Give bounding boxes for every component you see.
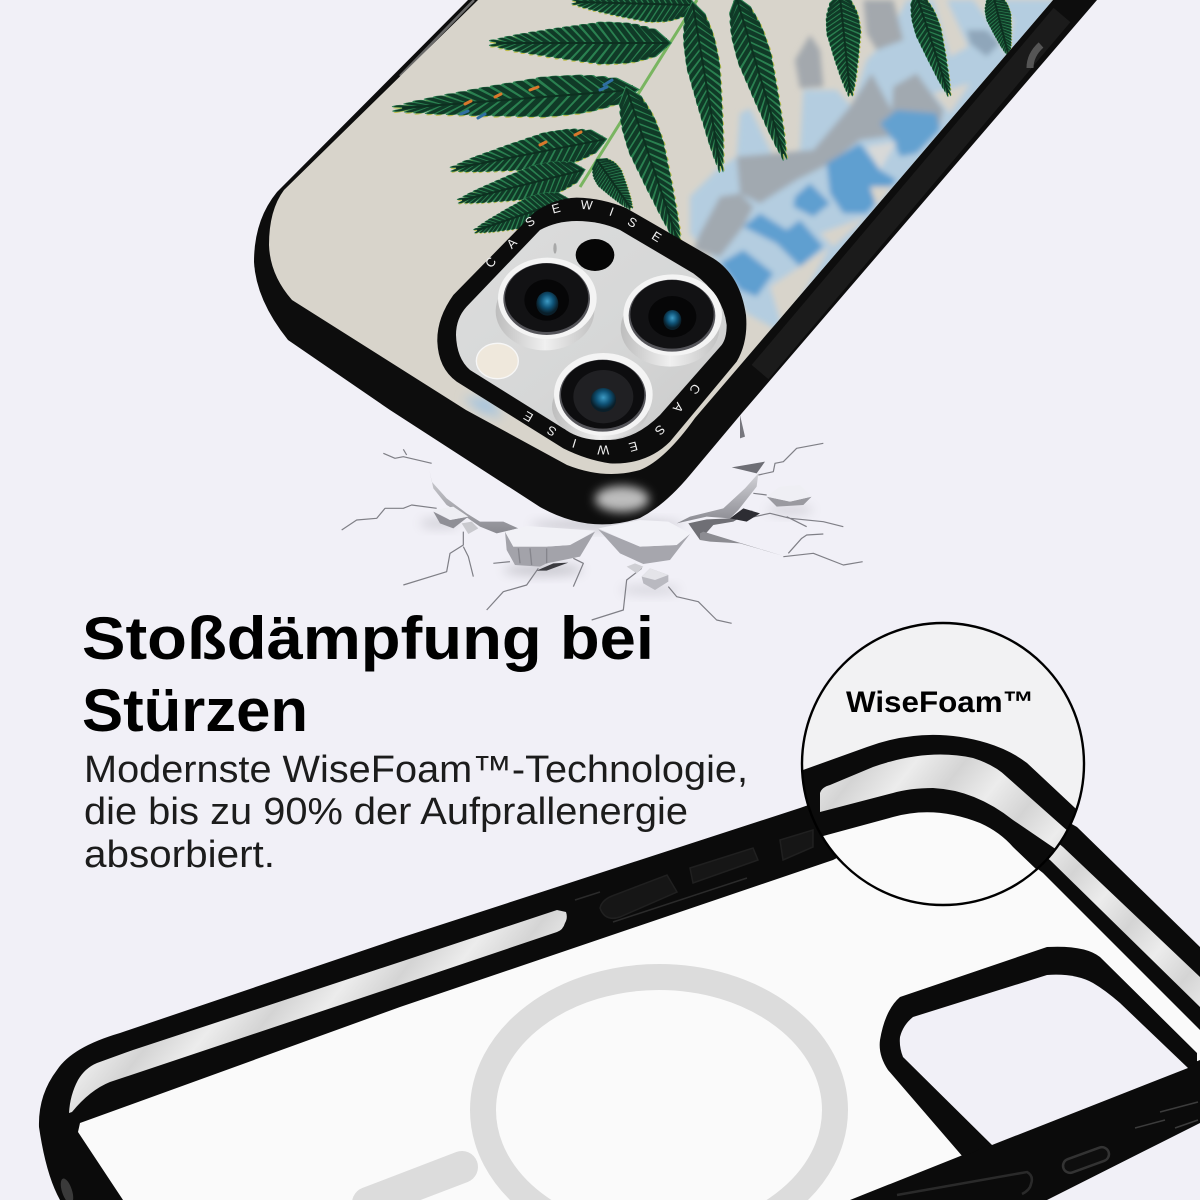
heading: Stürzen — [82, 677, 308, 744]
button seam lines — [575, 878, 747, 922]
heading: Stoßdämpfung bei — [82, 605, 654, 672]
callout: WiseFoam magnified circle — [800, 622, 1086, 906]
lens right — [621, 274, 722, 367]
brand text on camera frame: C — [686, 381, 703, 397]
callout label: WiseFoam™ — [846, 686, 1034, 719]
microphone hole — [576, 239, 614, 271]
lower left paint trace — [463, 397, 503, 418]
body text: Modernste WiseFoam™-Technologie, — [84, 749, 748, 791]
brand text on camera frame: S — [625, 214, 639, 231]
bottom edge button — [897, 1172, 1032, 1195]
small pin — [553, 243, 557, 254]
body text: die bis zu 90% der Aufprallenergie — [84, 791, 688, 833]
lens bottom — [552, 353, 653, 440]
lens upper left — [496, 258, 597, 350]
fern fronds — [395, 0, 1021, 248]
brand text on camera frame: E — [521, 408, 536, 425]
bottom edge streaks — [1135, 1102, 1198, 1128]
case outer bumper — [39, 755, 1200, 1200]
crack lines — [342, 443, 863, 623]
middle right stone — [598, 529, 690, 564]
brand text on camera frame — [483, 198, 703, 457]
small left stones — [433, 512, 468, 528]
camera module — [437, 198, 746, 463]
camera cutout opening — [900, 975, 1188, 1145]
tiny stones — [627, 563, 643, 573]
bottom open case — [39, 755, 1200, 1200]
camera plate — [456, 221, 727, 440]
brand text on camera frame: A — [670, 400, 686, 416]
right plate — [677, 473, 758, 523]
left edge port — [58, 1177, 76, 1200]
brand text on camera frame: E — [550, 201, 562, 217]
camera bump frame — [437, 198, 746, 463]
brand text on camera frame: E — [627, 438, 639, 454]
side buttons — [600, 830, 813, 918]
heading — [82, 605, 654, 744]
brand text on camera frame: C — [483, 255, 499, 271]
phone outer bumper — [254, 0, 1097, 524]
magnetic ring — [483, 977, 835, 1200]
brand text on camera frame: I — [607, 205, 616, 219]
fern colour accents — [461, 80, 612, 145]
brand text on camera frame: I — [571, 436, 578, 450]
brand text on camera frame: S — [523, 214, 538, 230]
top phone case — [254, 0, 1097, 524]
right foam slot — [1020, 820, 1200, 1007]
body text: absorbiert. — [84, 834, 275, 876]
brand text on camera frame: A — [504, 235, 520, 252]
flash — [476, 343, 518, 379]
cracked ground impact — [342, 415, 863, 623]
camera cutout frame — [880, 947, 1197, 1157]
bumper top left edge highlight — [400, 0, 474, 76]
watercolour sky — [463, 0, 1087, 418]
bottom edge port — [1061, 1145, 1111, 1175]
middle left stone — [505, 532, 595, 567]
body text — [84, 749, 748, 876]
small right stone — [767, 497, 812, 507]
bumper glossy corner highlight — [595, 486, 649, 512]
brand text on camera frame: S — [652, 422, 668, 438]
left plate edge — [429, 470, 518, 533]
left foam slot — [69, 910, 567, 1113]
magnet alignment bar — [368, 1167, 462, 1200]
brand text on camera frame: S — [545, 423, 559, 439]
brand text on camera frame: W — [597, 443, 609, 457]
brand text on camera frame: E — [649, 229, 664, 245]
bumper right side sheen — [760, 15, 1062, 372]
fern stem — [580, 0, 697, 187]
brand text on camera frame: W — [580, 198, 593, 213]
clear back interior — [78, 800, 1200, 1200]
printed back panel — [269, 0, 1053, 474]
